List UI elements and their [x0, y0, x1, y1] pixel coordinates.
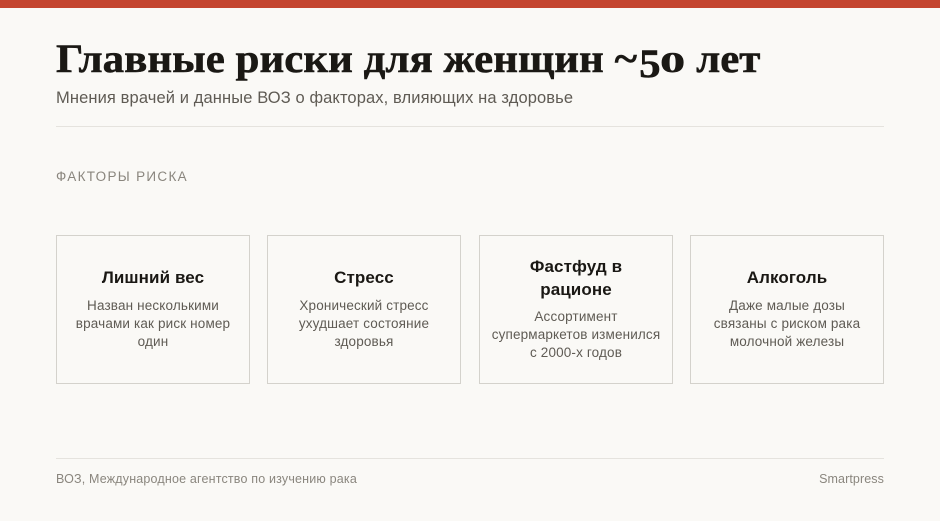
card text [299, 298, 429, 349]
header divider [56, 126, 884, 127]
card heading: Лишний вес [102, 268, 204, 287]
card heading: Фастфуд в [530, 257, 622, 276]
card heading: рационе [540, 280, 612, 299]
section label: ФАКТОРЫ РИСКА [56, 169, 188, 184]
card text [492, 309, 660, 360]
card text: молочной железы [730, 334, 844, 349]
card text: Назван несколькими [87, 298, 219, 313]
card text: ухудшает состояние [299, 316, 429, 331]
card text [714, 298, 860, 349]
card text: связаны с риском рака [714, 316, 860, 331]
top accent bar [0, 0, 940, 8]
panel: Алкоголь [690, 235, 884, 384]
title: Главные риски для женщин ~5 лет [56, 36, 760, 86]
panel: Лишний вес [56, 235, 250, 384]
card text: супермаркетов изменился [492, 327, 660, 342]
panel: Фастфуд в рационе [479, 235, 673, 384]
card text: один [138, 334, 168, 349]
card heading [530, 257, 622, 299]
footer source: ВОЗ, Международное агентство по изучению рака [56, 472, 357, 486]
card text: здоровья [334, 334, 394, 349]
card text: врачами как риск номер [76, 316, 230, 331]
card heading: Стресс [334, 268, 394, 287]
card text: Хронический стресс [299, 298, 429, 313]
footer brand: Smartpress [819, 472, 884, 486]
title: 0 [661, 47, 686, 79]
panel: Стресс [267, 235, 461, 384]
card heading: Алкоголь [747, 268, 827, 287]
subtitle: Мнения врачей и данные ВОЗ о факторах, влияющих на здоровье [56, 89, 573, 107]
card text [76, 298, 230, 349]
footer divider [56, 458, 884, 459]
card text: Ассортимент [534, 309, 618, 324]
card text: Даже малые дозы [729, 298, 845, 313]
card text: с 2000-х годов [530, 345, 622, 360]
